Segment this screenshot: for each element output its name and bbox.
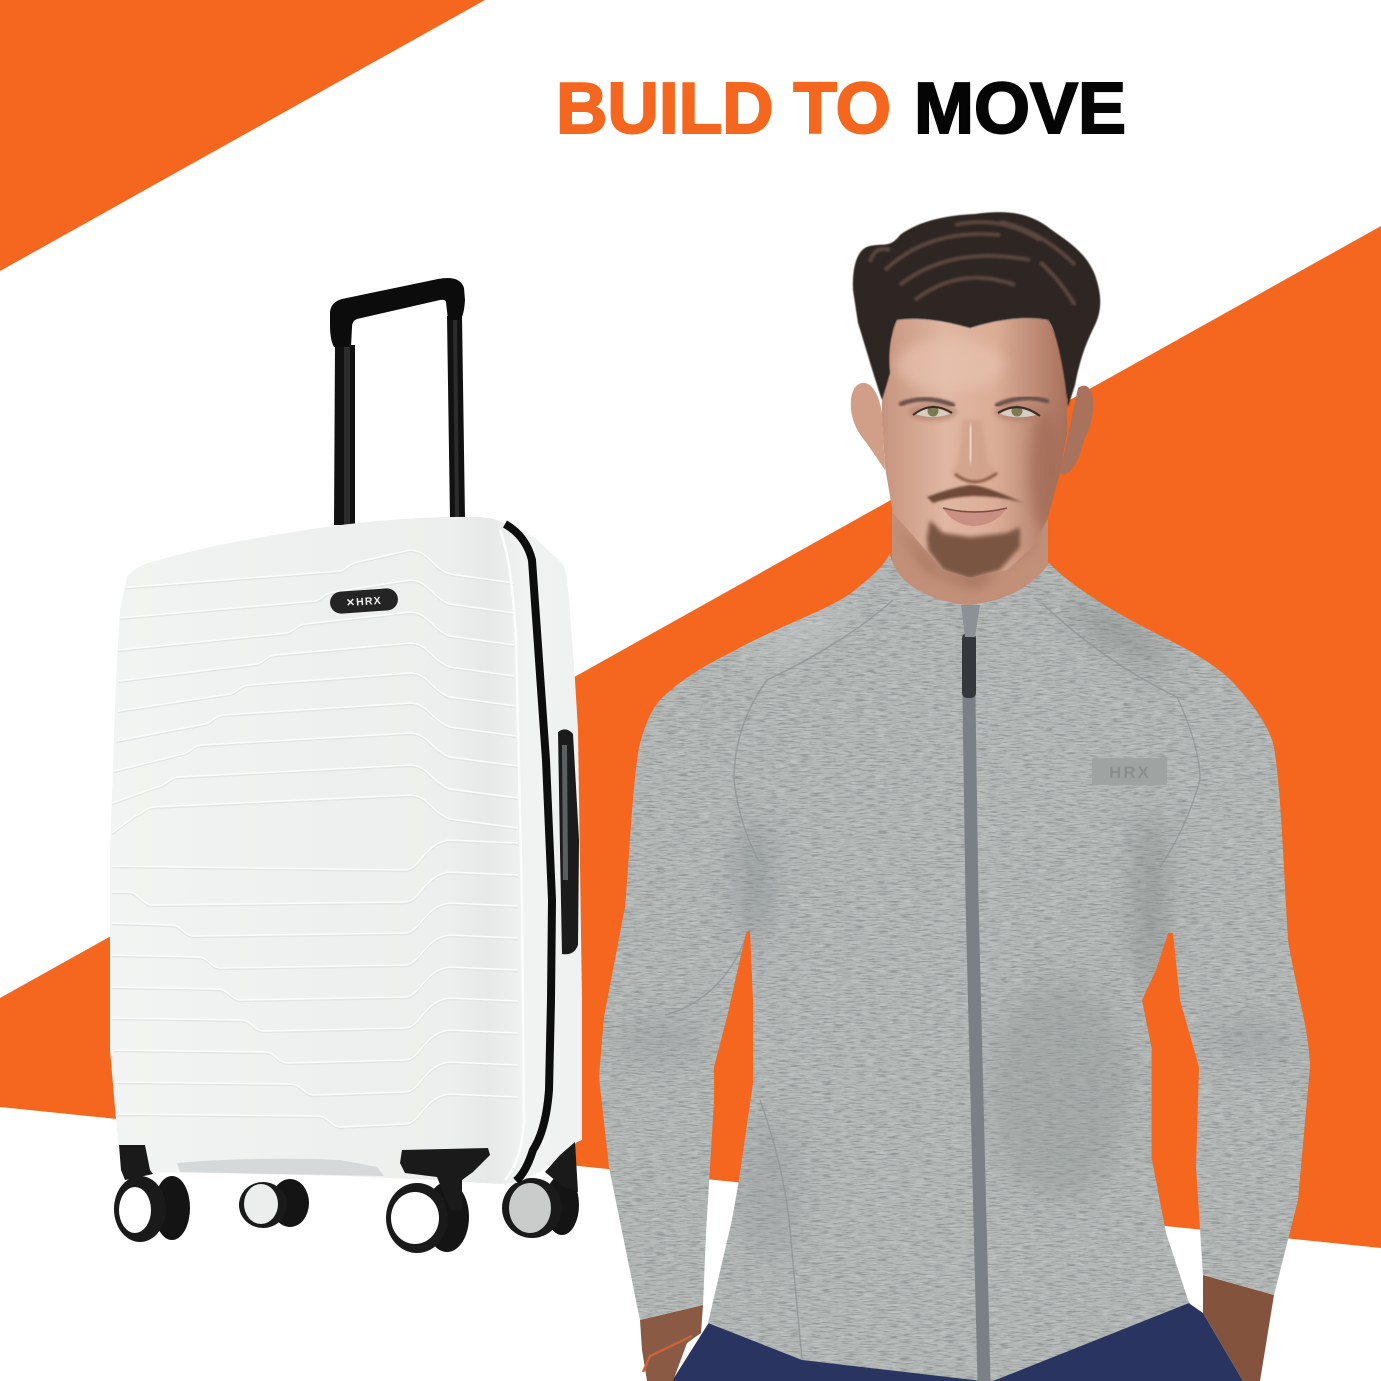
jacket: light heather flecks [590, 550, 1320, 1381]
suitcase body [110, 517, 582, 1184]
person: neck [892, 510, 1048, 610]
person: left hand and wrist [640, 1305, 703, 1381]
face: forehead highlight [893, 342, 1005, 388]
person: grey zip jacket [590, 550, 1320, 1381]
suitcase telescopic handle [330, 278, 465, 525]
face: right eye [998, 406, 1040, 417]
wheel: rear left [239, 1179, 309, 1228]
background: top-left orange triangle [0, 0, 485, 271]
zipper pull [962, 633, 976, 698]
face: left eye [913, 406, 952, 417]
face: eye sockets [909, 403, 1042, 421]
suitcase side carry handle [558, 729, 579, 954]
person: right hand and wrist [1203, 1275, 1274, 1381]
jacket: raglan seams [665, 600, 1200, 1360]
suitcase zipper [505, 524, 552, 1181]
wheel: front left [114, 1176, 190, 1242]
person: jacket zipper [961, 605, 984, 1381]
background: orange diagonal band [0, 226, 1381, 1248]
wheel: front right [386, 1182, 469, 1253]
face: cheek shading [1029, 410, 1061, 530]
suitcase brand badge [329, 588, 399, 614]
title: BUILD TO MOVE [556, 69, 1126, 149]
face: eyebrows [901, 398, 1047, 405]
suitcase wheels [114, 1175, 579, 1253]
suitcase centre seam highlight [500, 530, 524, 1180]
wheel: rear right [502, 1175, 579, 1238]
title part: MOVE: MOVE [914, 69, 1126, 149]
face: goatee beard [927, 520, 1020, 579]
suitcase underside shadow [177, 1159, 384, 1176]
person: chest logo [1092, 758, 1167, 785]
face: lips [943, 508, 1007, 526]
person: navy trousers [672, 1290, 1243, 1381]
face: moustache [927, 485, 1023, 503]
suitcase [110, 278, 582, 1253]
face: nose [952, 420, 998, 482]
person: ears [851, 383, 1093, 475]
suitcase brand badge: ✕HRX [346, 595, 382, 609]
suitcase wheel brackets [119, 1142, 578, 1210]
jacket: light and shadow [615, 593, 1295, 1260]
jacket: heather texture [590, 550, 1320, 1381]
suitcase ribs [112, 550, 518, 1128]
title part: BUILD TO: BUILD TO [556, 69, 891, 149]
person: hair [853, 212, 1100, 407]
person [590, 212, 1320, 1381]
person: face [882, 318, 1067, 578]
person: chest logo: HRX [1109, 763, 1151, 782]
